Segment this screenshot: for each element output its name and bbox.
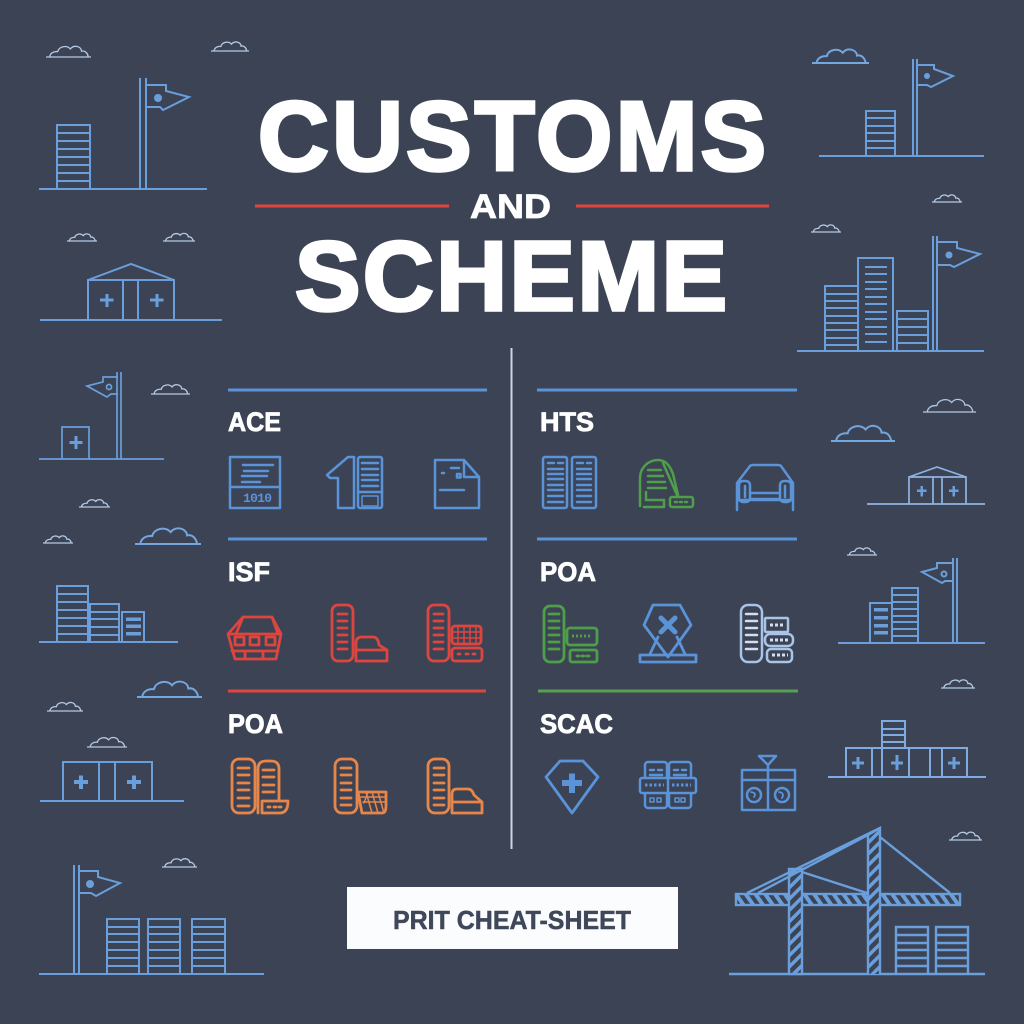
scene: left low building with crosses: [40, 762, 184, 801]
icon: light tower with labels: [741, 605, 793, 662]
heading: SCAC: SCAC: [540, 709, 613, 739]
icon: green tower: [544, 606, 597, 662]
icon: twin towers: [232, 759, 288, 813]
scene: top-left building and flag: [39, 78, 207, 189]
panel: HTS: [537, 388, 797, 510]
scene: bottom-left flag and three buildings: [39, 865, 264, 974]
icon: document: [435, 460, 479, 508]
scene: left warehouse: [40, 264, 222, 320]
scene: right buildings and flag: [838, 558, 985, 643]
icon: numbered file: [327, 457, 382, 508]
scene: top-right building and flag: [819, 59, 984, 156]
scene: right warehouse: [867, 467, 985, 504]
icon: two server racks: [543, 457, 596, 508]
icon: tower with block: [428, 759, 482, 813]
heading: HTS: HTS: [540, 407, 594, 437]
scene: left clinic door and flag: [39, 372, 164, 459]
title: SCHEME: SCHEME: [295, 221, 727, 331]
title: CUSTOMS: CUSTOMS: [258, 81, 766, 191]
call to action button: [347, 887, 678, 949]
icon: car front: [737, 465, 793, 510]
clouds: [43, 42, 982, 867]
icon: x marker: [640, 605, 696, 662]
call to action button: PRIT CHEAT-SHEET: [393, 905, 631, 935]
scene: right city block and flag: [797, 236, 984, 351]
heading: ISF: ISF: [228, 557, 270, 587]
title: AND: AND: [470, 188, 551, 226]
scene: right long building: [828, 721, 986, 777]
panel: POA left: [228, 690, 486, 813]
title rule left: [255, 204, 449, 208]
heading: POA: POA: [228, 709, 283, 739]
icon: data sheet: 1010: [243, 491, 272, 506]
heading: ACE: ACE: [228, 407, 281, 437]
icon: data sheet: [230, 457, 280, 508]
scene: port crane with containers: [729, 828, 985, 974]
icon: twin racks: [640, 762, 696, 808]
icon: box with antenna: [742, 756, 795, 810]
icon: basket: [228, 617, 281, 659]
scene: left stepped buildings: [39, 586, 178, 642]
central divider: [510, 348, 512, 849]
panel: SCAC: [538, 690, 798, 813]
panel: ISF: [228, 538, 487, 661]
title rule right: [576, 204, 769, 208]
icon: tower with mesh: [335, 759, 386, 813]
heading: POA: POA: [540, 557, 596, 587]
icon: tower with block: [332, 605, 387, 661]
icon: green slanted rack: [640, 460, 693, 507]
icon: tower with grids: [428, 605, 482, 661]
large blue clouds: [135, 49, 895, 697]
icon: shield with cross: [546, 761, 598, 813]
panel: POA right: [537, 538, 797, 662]
panel: ACE: [228, 388, 487, 508]
